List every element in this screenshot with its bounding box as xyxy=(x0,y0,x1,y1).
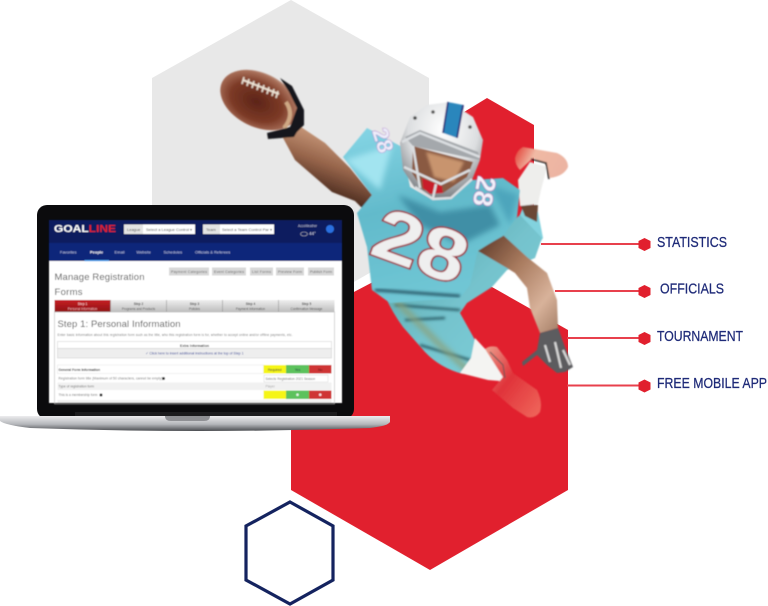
form table: General Form Information xyxy=(58,368,100,372)
callout: officials xyxy=(638,282,724,298)
extra information box: ✓ Click here to insert additional instructions at the top of Step 1 xyxy=(145,352,244,356)
laptop screen: Forms xyxy=(54,287,83,298)
raised leg xyxy=(512,147,568,258)
hexagon marker xyxy=(638,285,650,298)
laptop xyxy=(0,205,390,431)
facemask xyxy=(402,133,480,199)
form table: Registration form title (Maximum of 50 characters, cannot be empty) xyxy=(58,376,162,380)
jersey shading xyxy=(345,145,518,296)
callout: statistics xyxy=(638,235,727,251)
shorts and thigh xyxy=(385,215,542,374)
jersey number: 28 xyxy=(363,192,479,300)
form table: Selects Registration 2021 Season xyxy=(266,377,315,381)
form table xyxy=(58,365,332,403)
form table: This is a membership form xyxy=(58,393,98,397)
shoe outline xyxy=(490,352,505,378)
stepper: Confirmation Message xyxy=(291,307,323,311)
stepper: Payment Information xyxy=(236,307,265,311)
action buttons xyxy=(169,268,334,276)
face xyxy=(412,146,473,193)
navy outline hexagon xyxy=(246,502,333,604)
league selector xyxy=(124,224,195,234)
weather: AccuWeather xyxy=(298,224,318,228)
league selector: Select a League Control ▾ xyxy=(146,227,192,232)
laptop screen: 44° xyxy=(309,231,316,236)
form table: Player xyxy=(266,384,276,388)
stepper: Step 2 xyxy=(134,302,144,306)
stepper xyxy=(54,300,334,312)
site header xyxy=(49,220,342,243)
shoe xyxy=(485,346,541,417)
stepper: Step 4 xyxy=(246,302,256,306)
hexagon marker xyxy=(638,332,650,345)
laptop screen: Event Categories xyxy=(214,270,244,274)
hexagon marker xyxy=(638,238,650,251)
player xyxy=(210,58,573,417)
callout: officials: OFFICIALS xyxy=(660,282,724,298)
stepper: Step 5 xyxy=(302,302,312,306)
shorts shading xyxy=(395,300,470,372)
jersey xyxy=(343,128,520,303)
stepper: Step 3 xyxy=(190,302,200,306)
form table: Yes xyxy=(295,368,301,372)
white sock xyxy=(460,338,503,381)
right arm xyxy=(478,235,558,333)
laptop screen: Step 1: Personal Information xyxy=(58,319,180,330)
stepper: Personal Information xyxy=(68,307,97,311)
laptop base xyxy=(0,412,390,431)
football xyxy=(210,58,308,142)
team selector: Select a Team Control Par ▾ xyxy=(222,227,272,232)
step description: Enter basic information about this registration form such as the title, who this registration form is for, whether to accept online and/or offline payments, etc. xyxy=(58,333,293,337)
connector lines xyxy=(541,244,640,386)
catching glove xyxy=(267,78,304,139)
stepper: Step 1 xyxy=(78,302,88,306)
stepper: Programs and Products xyxy=(122,307,156,311)
team selector xyxy=(203,224,274,234)
gray hexagon xyxy=(152,0,429,318)
nav bar xyxy=(49,243,342,261)
laptop screen: Email xyxy=(114,250,125,254)
right glove xyxy=(522,328,573,373)
laptop screen: Schedules xyxy=(164,250,182,254)
form table: No xyxy=(318,368,322,372)
team selector: Team xyxy=(206,227,216,232)
page title: Manage Registration xyxy=(54,272,144,283)
league selector: League xyxy=(127,227,141,232)
mouth xyxy=(422,178,443,194)
laptop screen: List Forms xyxy=(252,270,271,274)
laptop screen xyxy=(49,220,342,404)
form table: Type of registration form xyxy=(58,384,94,388)
laptop screen: Publish Form xyxy=(310,270,332,274)
left arm xyxy=(282,125,372,208)
stepper: Policies xyxy=(189,307,200,311)
step heading xyxy=(54,312,334,404)
laptop screen: Preview Form xyxy=(278,270,302,274)
sleeve number right: 28 xyxy=(467,174,502,209)
hexagon marker xyxy=(638,380,650,392)
logo: GOAL LINE xyxy=(54,223,116,235)
laptop bezel xyxy=(37,205,354,419)
large red hexagon xyxy=(291,252,568,570)
form table: Required xyxy=(268,368,282,372)
laptop screen: People xyxy=(90,250,104,254)
laptop screen: Officials & Referees xyxy=(195,250,230,254)
callout: statistics: STATISTICS xyxy=(657,235,727,251)
laptop screen: Website xyxy=(136,250,152,254)
extra information box: Extra Information xyxy=(180,344,209,348)
sleeve number left: 28 xyxy=(367,125,399,156)
small red hexagon xyxy=(446,98,534,250)
laptop screen: Payment Categories xyxy=(171,270,207,274)
callout: tournament: TOURNAMENT xyxy=(657,329,743,345)
extra information box xyxy=(58,342,332,358)
helmet xyxy=(400,102,483,200)
laptop screen: Favorites xyxy=(60,250,76,254)
